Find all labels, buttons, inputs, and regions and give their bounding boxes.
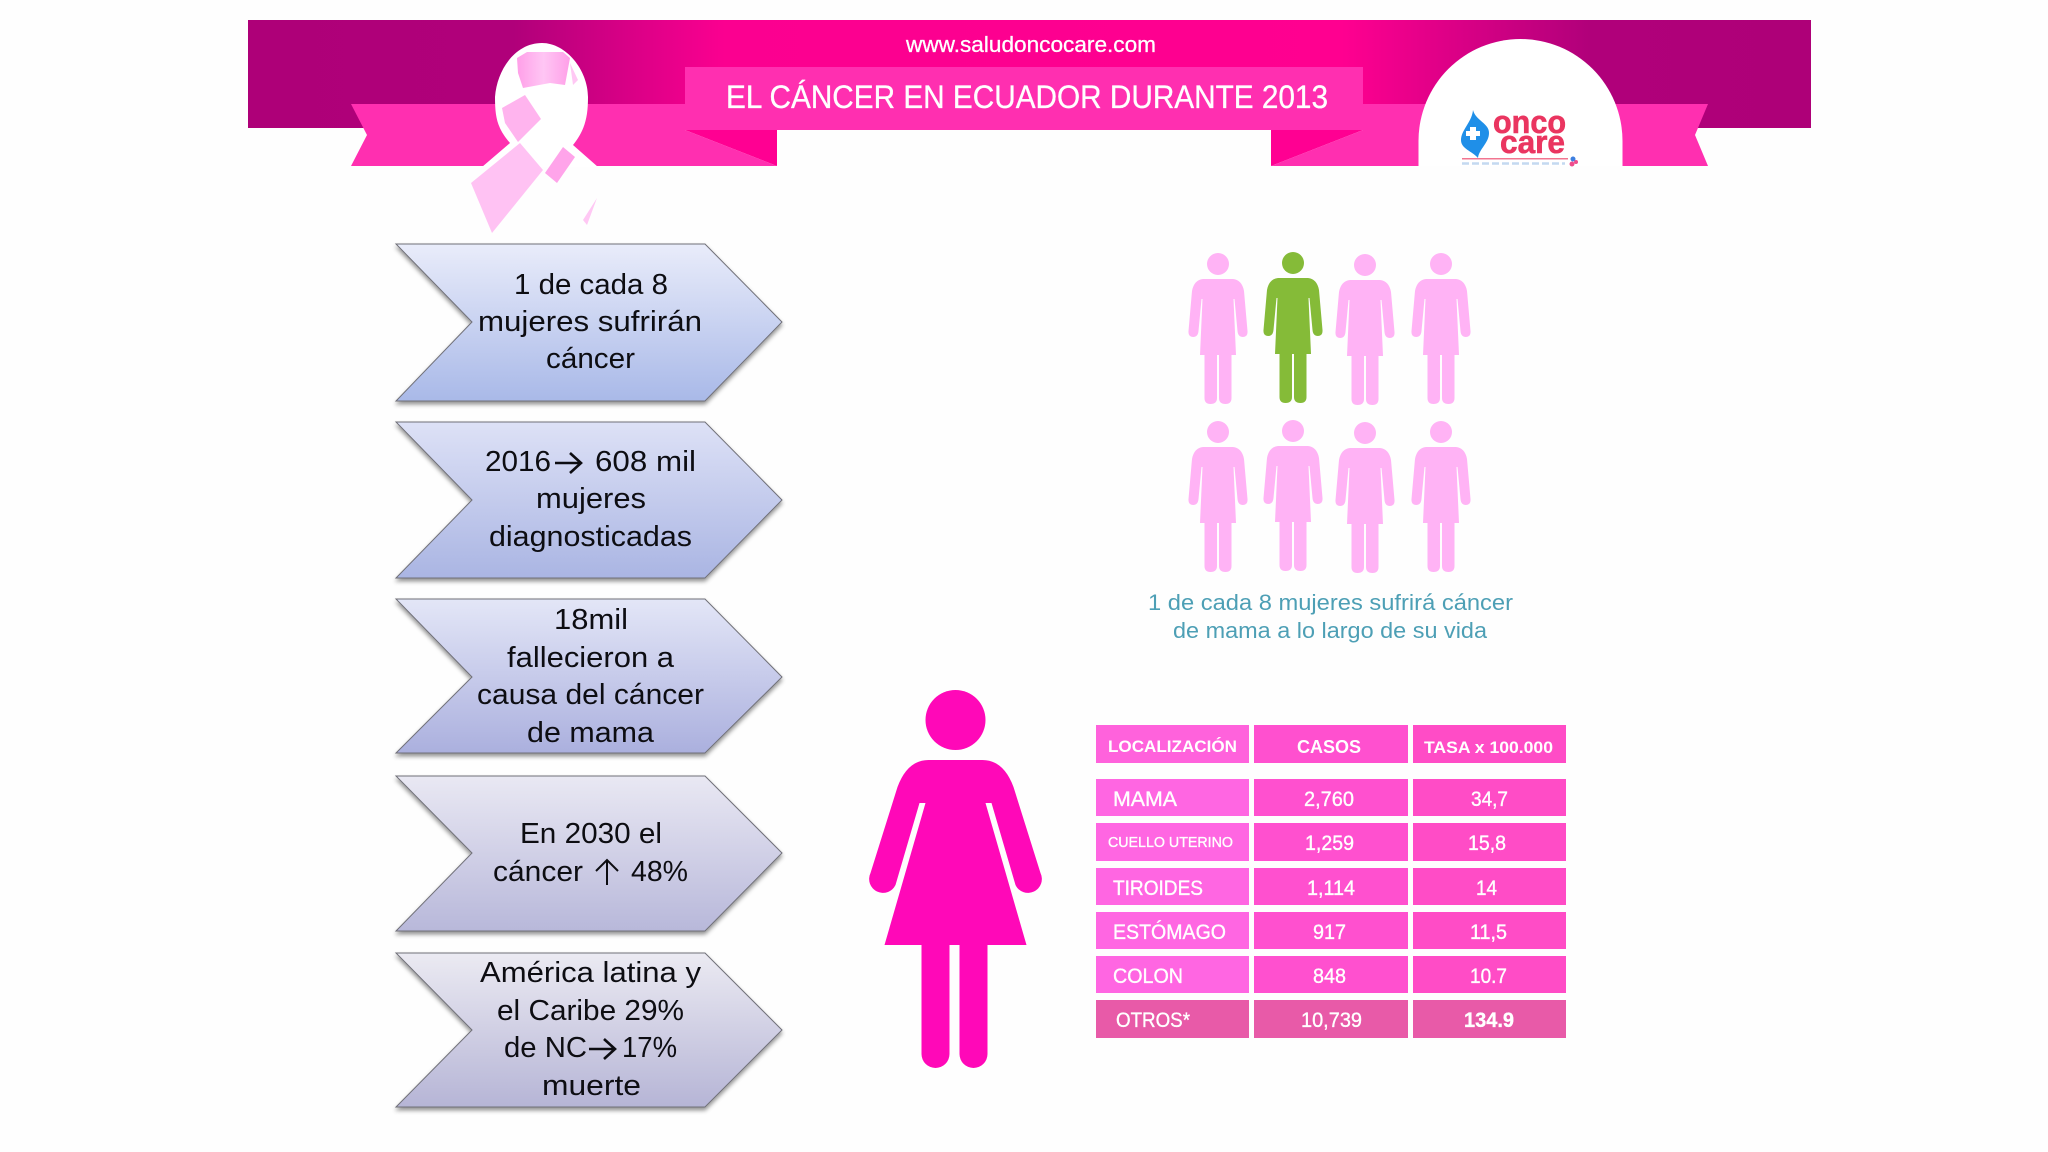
chevron 2: diagnosticadas xyxy=(489,521,692,553)
chevron 2 xyxy=(396,422,782,578)
row: colon: 10.7 xyxy=(1470,965,1507,988)
row: estomago: 11,5 xyxy=(1470,921,1507,944)
title: EL CÁNCER EN ECUADOR DURANTE 2013 xyxy=(726,79,1328,115)
woman row 2 col 3 xyxy=(1335,422,1395,573)
woman row 2 col 1 xyxy=(1188,421,1248,572)
chevron 1: cáncer xyxy=(546,343,635,375)
row: cuello uterino xyxy=(1108,832,1506,855)
row: otros xyxy=(1116,1009,1514,1032)
row: cuello uterino: 1,259 xyxy=(1305,832,1354,855)
right fold xyxy=(1271,130,1363,166)
logo word care: care xyxy=(1500,124,1565,160)
chevron 3: 18mil xyxy=(554,604,628,636)
pictogram caption xyxy=(1148,590,1513,643)
icon: white cross xyxy=(1466,127,1480,140)
row: mama xyxy=(1113,788,1508,811)
table: cases by location xyxy=(1096,725,1566,1038)
row: cuello uterino: CUELLO UTERINO xyxy=(1108,834,1233,851)
pictogram caption: de mama a lo largo de su vida xyxy=(1173,618,1488,643)
row: mama: 34,7 xyxy=(1471,788,1508,811)
chevron 4: 48% xyxy=(631,856,688,888)
row: tiroides: 1,114 xyxy=(1307,877,1355,900)
row: colon xyxy=(1113,965,1507,988)
row: tiroides: 14 xyxy=(1476,877,1497,900)
chevron 2: mujeres xyxy=(536,483,646,515)
right ribbon strip xyxy=(1363,104,1708,166)
chevron 2: 608 mil xyxy=(595,446,696,478)
logo tagline stroke xyxy=(1462,162,1565,165)
woman row 2 col 4 xyxy=(1411,421,1471,572)
left ribbon strip xyxy=(351,104,685,166)
title band xyxy=(685,67,1363,130)
chevron 5: el Caribe 29% xyxy=(497,995,684,1027)
panel: chevron list xyxy=(396,244,782,1107)
row: mama: MAMA xyxy=(1113,788,1177,811)
logo rule xyxy=(1462,158,1568,160)
woman row 1 col 3 xyxy=(1335,254,1395,405)
left fold base xyxy=(685,130,777,166)
row: estomago: ESTÓMAGO xyxy=(1113,921,1226,944)
white badge xyxy=(1418,39,1622,166)
chevron 1 xyxy=(396,244,782,401)
row: estomago: 917 xyxy=(1313,921,1346,944)
icon: awareness ribbon xyxy=(471,43,598,233)
row: otros: 134.9 xyxy=(1464,1009,1514,1032)
row: colon: 848 xyxy=(1313,965,1346,988)
chevron 5: América latina y xyxy=(480,957,702,989)
chevron 4 xyxy=(396,776,782,931)
chevron 3: causa del cáncer xyxy=(477,679,704,711)
logo: onco care xyxy=(1418,39,1622,166)
row: otros: OTROS* xyxy=(1116,1009,1190,1032)
chevron 5: 17% xyxy=(622,1032,677,1064)
chevron 2: 2016 xyxy=(485,446,551,478)
woman row 1 col 4 xyxy=(1411,253,1471,404)
table header row: LOCALIZACIÓN xyxy=(1108,737,1237,756)
icon: large woman xyxy=(869,690,1042,1068)
arrow right xyxy=(589,1039,615,1059)
woman row 1 col 1 xyxy=(1188,253,1248,404)
logo word onco: onco xyxy=(1493,104,1566,140)
chevron 5 xyxy=(396,953,782,1107)
icon: small flower xyxy=(1570,156,1578,166)
chevron 3: de mama xyxy=(527,717,655,749)
left fold xyxy=(685,130,777,166)
row: tiroides: TIROIDES xyxy=(1113,877,1203,900)
row: otros: 10,739 xyxy=(1301,1009,1362,1032)
website url: www.saludoncocare.com xyxy=(905,32,1156,57)
chevron 4: cáncer xyxy=(493,856,583,888)
chevron 3: fallecieron a xyxy=(507,642,675,674)
table cells xyxy=(1096,725,1566,1038)
pictogram caption: 1 de cada 8 mujeres sufrirá cáncer xyxy=(1148,590,1513,615)
chevron 5: de NC xyxy=(504,1032,587,1064)
icon: blue flame xyxy=(1461,110,1489,158)
woman row 1 col 2 highlighted xyxy=(1263,252,1323,403)
pictogram: 1 in 8 women xyxy=(1148,252,1513,643)
row: mama: 2,760 xyxy=(1304,788,1354,811)
arrow up xyxy=(596,860,618,885)
row: cuello uterino: 15,8 xyxy=(1468,832,1506,855)
row: colon: COLON xyxy=(1113,965,1183,988)
header banner xyxy=(248,20,1811,166)
table header row: TASA x 100.000 xyxy=(1424,738,1553,757)
chevron 5: muerte xyxy=(542,1070,641,1102)
chevron 3 xyxy=(396,599,782,753)
chevron 1: mujeres sufrirán xyxy=(478,306,702,338)
right fold base xyxy=(1271,130,1363,166)
table header row: CASOS xyxy=(1297,737,1361,757)
row: tiroides xyxy=(1113,877,1497,900)
woman row 2 col 2 xyxy=(1263,420,1323,571)
table header row xyxy=(1108,737,1553,757)
arrow right xyxy=(555,453,581,473)
row: estomago xyxy=(1113,921,1507,944)
chevron 4: En 2030 el xyxy=(520,818,662,850)
chevron 1: 1 de cada 8 xyxy=(514,269,668,301)
